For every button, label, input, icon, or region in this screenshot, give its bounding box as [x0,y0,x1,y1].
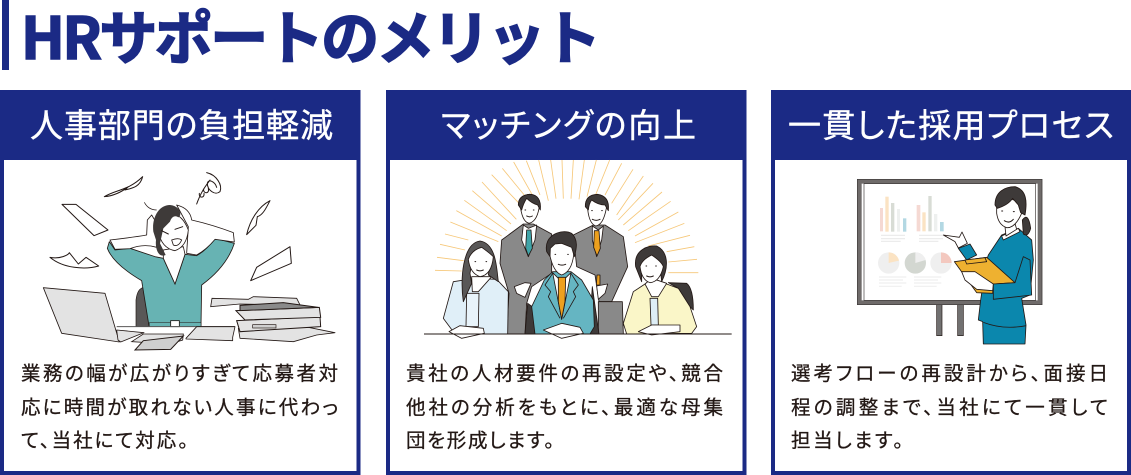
body text: 団を形成します。 [406,424,554,453]
body text: 業務の幅が広がりすぎて応募者対 [21,357,338,386]
body text: 貴社の人材要件の再設定や、競合 [406,357,723,386]
body text: 応に時間が取れない人事に代わっ [21,391,338,420]
body text: て、当社にて対応。 [21,424,188,453]
panel: consistent hiring process [771,90,1131,473]
illustration: overwhelmed woman at desk [43,173,335,350]
body text [21,357,338,453]
body text: 選考フローの再設計から、面接日 [791,357,1108,386]
body text: 程の調整まで、当社にて一貫して [791,391,1108,420]
heading: consistent hiring process: 一貫した採用プロセス [788,99,1114,147]
illustration: five-person team with sunburst [424,160,732,338]
body text: 他社の分析をもとに、最適な母集 [406,391,723,420]
heading: better matching: マッチングの向上 [441,99,696,147]
heading: workload reduction: 人事部門の負担軽減 [30,99,333,147]
body text [406,357,723,453]
body text: 担当します。 [791,424,903,453]
body text [791,357,1108,453]
title accent bar [2,0,9,70]
panel: workload reduction [0,90,360,473]
illustration: presenter at board [857,179,1042,344]
panel: better matching [386,90,746,473]
